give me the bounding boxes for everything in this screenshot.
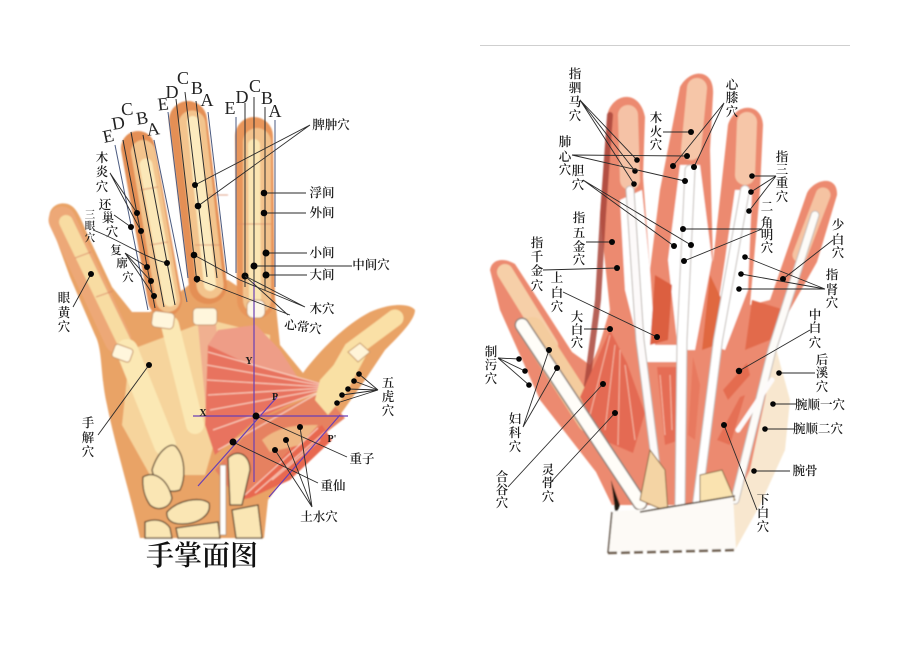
point: 灵骨穴: 穴 [542,489,555,504]
point: 还巢穴: 穴 [106,224,119,239]
point: 三眼穴: 穴 [85,231,96,244]
point: 腕骨: 腕骨 [792,463,818,478]
point: 肺心穴 [559,134,690,184]
point: 制污穴 [485,344,532,388]
point: 重仙 [230,438,346,493]
point: 腕顺二穴 [762,421,843,436]
point: 二角明穴: 明 [761,228,773,242]
point: 合谷穴: 穴 [496,495,509,510]
point: 指千金穴: 穴 [531,278,544,293]
point: 下白穴: 下 [757,493,770,507]
axis lines X Y P P': P' [328,434,337,445]
point: 心膝穴: 心 [726,78,740,92]
point: 上白穴: 上 [551,270,564,285]
point: 下白穴 [721,422,770,534]
point: 指三重穴 [746,149,789,214]
point: 木炎穴: 穴 [96,179,109,194]
point: 妇科穴: 穴 [509,439,522,454]
point: 土水穴 [272,424,338,524]
point: 灵骨穴: 灵 [542,462,555,477]
letters A to E: B [191,78,203,98]
point: 下白穴: 白 [757,505,769,520]
point: 指五金穴: 穴 [573,252,586,267]
point: 木穴 [191,252,335,316]
point: 外间 [261,205,335,220]
point: 大间 [262,267,335,282]
point: 妇科穴 [509,347,560,454]
letters A to E: E [101,125,116,147]
point: 二角明穴: 二 [761,200,773,214]
point: 后溪穴: 穴 [816,379,829,394]
point: 少白穴: 少 [832,217,845,232]
point: 五虎穴 [334,371,395,418]
point: 手解穴 [82,362,152,459]
point: 指驷马穴 [569,66,640,187]
letters A to E [101,68,281,147]
point: 三眼穴 [85,209,170,266]
point: 小间 [262,245,335,260]
point: 灵骨穴 [542,410,618,504]
point: 下白穴: 穴 [757,519,770,534]
point: 指驷马穴: 穴 [569,108,582,123]
point: 灵骨穴: 骨 [542,476,555,490]
point: 中白穴: 穴 [809,335,822,350]
point: 指三重穴: 指 [776,149,789,164]
point: 眼黄穴 [58,271,94,334]
point: 指驷马穴: 指 [569,66,582,81]
point: 心常穴 [194,276,323,337]
point: 复廓穴: 穴 [122,270,134,284]
point: 还巢穴: 还 [99,198,112,212]
point: 上白穴 [551,270,660,340]
point: 指五金穴 [573,210,615,267]
axis lines X Y P P': P [272,392,278,403]
axis lines X Y P P': Y [245,356,253,367]
point: 大白穴: 大 [571,309,584,324]
point: 指千金穴: 金 [531,263,544,278]
letters A to E: B [135,107,149,129]
point: 制污穴: 制 [485,344,497,359]
letters A to E: A [268,101,282,121]
point: 肺心穴: 穴 [559,162,572,177]
panel: palm view hand [49,68,415,572]
letters A to E: D [166,82,178,102]
point: 重子 [252,412,375,466]
muscle and tendon detail [620,190,655,350]
point: 复廓穴: 廓 [116,257,128,270]
point: 大白穴 [571,309,613,350]
point: 上白穴: 白 [551,285,563,300]
point: 少白穴: 穴 [832,245,845,260]
point: 腕顺一穴: 腕顺一穴 [795,397,845,412]
point: 妇科穴: 科 [509,425,522,440]
point: 手解穴: 穴 [82,444,95,459]
point: 手解穴: 解 [82,431,95,445]
point: 大白穴: 白 [571,322,583,337]
point: 三眼穴: 眼 [85,220,96,232]
point: 木火穴: 木 [650,110,663,125]
point: 指肾穴: 肾 [826,282,838,297]
point: 指三重穴: 重 [776,175,789,190]
point: 上白穴: 穴 [551,299,564,314]
finger meridian lines A to E [115,92,275,310]
point: 腕顺一穴 [770,397,845,412]
point: 木炎穴: 木 [96,150,109,165]
point: 腕骨 [751,463,818,478]
letters A to E: E [224,98,236,118]
letters A to E: A [145,118,161,140]
point: 木炎穴 [96,150,144,234]
point: 少白穴: 白 [832,232,844,247]
point: 中白穴 [736,307,822,374]
point: 腕顺二穴: 腕顺二穴 [793,421,843,436]
letters A to E: A [200,90,214,110]
point: 中白穴: 白 [809,320,821,335]
point: 肺心穴: 心 [559,150,573,164]
point: 指肾穴 [736,254,839,310]
point: 指五金穴: 金 [573,239,586,254]
point: 木火穴: 穴 [650,137,663,152]
point: 木火穴 [650,110,694,152]
point: 指千金穴 [531,235,620,293]
point: 二角明穴 [680,200,774,264]
point: 脾肿穴: 脾肿穴 [312,117,350,132]
illustration: palm anatomy [49,120,415,538]
point: 大间: 大间 [309,267,335,282]
point: 后溪穴: 后 [816,352,829,367]
point: 眼黄穴: 黄 [58,305,72,320]
point: 中间穴 [250,257,390,272]
point: 复廓穴 [110,244,157,299]
heading: palm view caption: 手掌面图 [146,540,258,572]
point: 还巢穴 [99,198,134,239]
point: 眼黄穴: 眼 [58,291,71,305]
point: 木火穴: 火 [650,124,663,139]
point: 木穴: 木穴 [309,301,335,316]
point: 指三重穴: 三 [776,163,789,177]
point: 肺心穴: 肺 [559,134,572,149]
point: 合谷穴 [496,381,606,510]
point: 复廓穴: 复 [110,244,122,257]
point: 心膝穴: 膝 [726,90,739,105]
point: 制污穴: 穴 [485,371,498,386]
letters A to E: B [261,88,273,108]
point: 心常穴: 心常穴 [283,316,323,337]
point: 二角明穴: 穴 [761,240,774,255]
point: 合谷穴: 谷 [496,483,509,497]
point: 心膝穴 [670,78,740,170]
point: 指三重穴: 穴 [776,189,789,204]
point: 大白穴: 穴 [571,335,584,350]
point: 二角明穴: 角 [761,215,773,230]
letters A to E: C [249,76,261,96]
point: 土水穴: 土水穴 [300,509,338,524]
point: 合谷穴: 合 [496,469,509,484]
point: 后溪穴 [776,352,829,394]
panel: back of hand tendons [485,66,845,553]
muscle fans are part of this illustration [205,345,330,455]
point: 小间: 小间 [309,245,335,260]
point: 木炎穴: 炎 [96,165,109,179]
point: 五虎穴: 五 [382,376,395,390]
letters A to E: D [110,112,126,134]
point: 浮间: 浮间 [309,185,335,200]
point: 胆穴: 胆 [572,164,585,178]
letters A to E: E [157,93,170,115]
point: 还巢穴: 巢 [102,210,115,225]
axis lines X Y P P' [193,282,348,497]
point: 眼黄穴: 穴 [58,319,71,334]
point: 妇科穴: 妇 [509,411,521,426]
point: 重子: 重子 [349,451,375,466]
point: 指驷马穴: 驷 [569,81,582,95]
point: 心膝穴: 穴 [726,104,739,119]
point: 指千金穴: 指 [531,235,544,250]
illustration: tendons and muscles [490,74,837,553]
point: 手解穴: 手 [82,415,95,430]
point: 制污穴: 污 [485,358,498,372]
axis lines X Y P P': X [199,408,207,419]
point: 胆穴 [572,164,694,249]
point: 胆穴: 穴 [572,177,585,192]
point: 重仙: 重仙 [320,478,346,493]
point: 中白穴: 中 [809,307,821,322]
point: 三眼穴: 三 [85,209,96,221]
point: 指五金穴: 五 [573,226,586,240]
point: 中间穴: 中间穴 [352,257,390,272]
point: 浮间 [261,185,335,200]
point: 指千金穴: 千 [531,249,544,264]
point: 五虎穴: 虎 [382,389,395,404]
point: 指五金穴: 指 [573,210,586,225]
letters A to E: C [177,68,189,88]
point: 指肾穴: 指 [826,267,839,282]
letters A to E: D [236,87,248,107]
point: 少白穴 [780,217,845,282]
point: 外间: 外间 [309,205,335,220]
point: 指驷马穴: 马 [569,94,581,109]
point: 后溪穴: 溪 [816,365,829,380]
point: 五虎穴: 穴 [382,403,395,418]
letters A to E: C [120,98,134,120]
point: 指肾穴: 穴 [826,295,839,310]
point: 脾肿穴 [192,117,350,209]
